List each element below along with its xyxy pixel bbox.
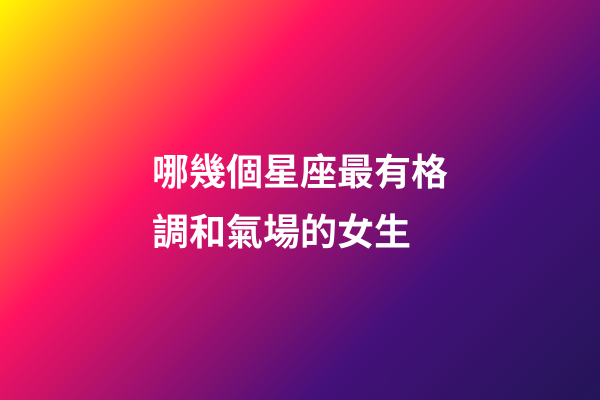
title bbox=[152, 152, 448, 253]
title: 哪幾個星座最有格 bbox=[152, 152, 448, 193]
title: 調和氣場的女生 bbox=[152, 212, 411, 253]
